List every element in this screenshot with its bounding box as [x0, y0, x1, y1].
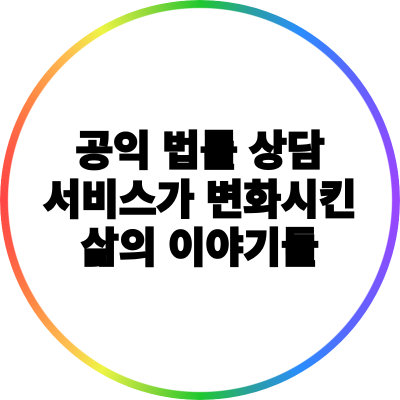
title: 서비스가 변화시킨	[43, 176, 357, 222]
title: 삶의 이야기들	[81, 225, 319, 271]
title	[42, 128, 357, 271]
title: 공익 법률 상담	[75, 128, 325, 174]
